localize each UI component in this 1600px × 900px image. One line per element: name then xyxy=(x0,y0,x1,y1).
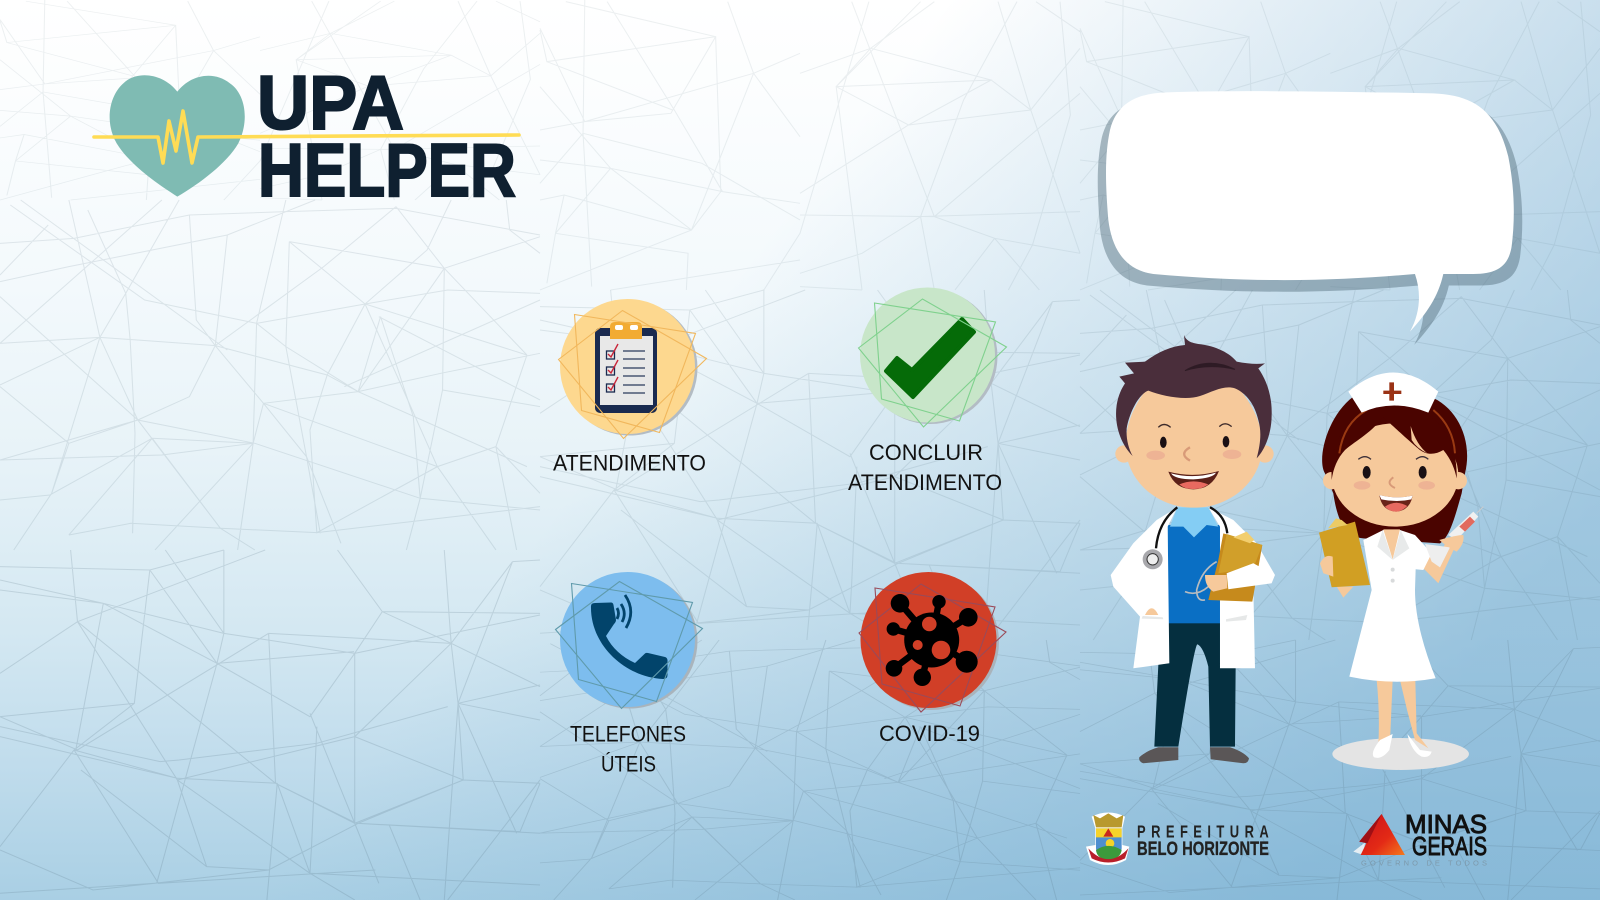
shirt collar xyxy=(1170,507,1218,537)
text: Prefeitura: PREFEITURA xyxy=(1137,823,1269,842)
hair back xyxy=(1322,397,1467,543)
eyes, cheeks, nose xyxy=(1354,457,1435,490)
mouth xyxy=(1379,495,1413,512)
logo: UPA Helper xyxy=(94,61,519,212)
face xyxy=(1126,387,1262,508)
icon: coat of arms xyxy=(1086,812,1129,865)
label xyxy=(570,722,686,776)
icon circle xyxy=(862,289,998,424)
icon circle xyxy=(562,574,698,708)
logo: Minas Gerais xyxy=(1353,809,1487,868)
title: HELPER: HELPER xyxy=(258,128,516,212)
menu item: covid-19 xyxy=(859,572,1006,746)
legs xyxy=(1377,680,1428,748)
decorative squares xyxy=(556,582,702,708)
trousers xyxy=(1154,620,1236,747)
label: TELEFONES xyxy=(570,722,686,746)
hair xyxy=(1116,335,1272,458)
heartbeat line xyxy=(94,111,519,163)
nurse cap xyxy=(1348,372,1438,413)
face xyxy=(1332,423,1458,527)
nurse illustration xyxy=(1319,372,1483,770)
icon circle xyxy=(863,574,999,710)
logo: Prefeitura Belo Horizonte xyxy=(1086,812,1269,865)
doctor illustration xyxy=(1111,335,1275,763)
decorative squares xyxy=(859,584,1006,712)
menu item: concluir atendimento xyxy=(848,288,1006,495)
syringe xyxy=(1439,507,1483,552)
neck and collar xyxy=(1377,529,1409,560)
menu item: telefones uteis xyxy=(556,572,702,776)
decorative squares xyxy=(858,299,1006,427)
text: Minas: MINAS xyxy=(1405,809,1487,839)
shoes xyxy=(1373,734,1432,758)
title: UPA: UPA xyxy=(257,61,404,146)
stethoscope tube xyxy=(1185,562,1217,600)
icon: triangle xyxy=(1353,814,1405,855)
label: ATENDIMENTO xyxy=(553,450,706,476)
icon: clipboard xyxy=(595,322,657,413)
floor shadow xyxy=(1332,738,1469,770)
lab coat xyxy=(1111,507,1275,668)
sweater xyxy=(1168,525,1220,623)
menu item: atendimento xyxy=(553,299,706,476)
clipboard xyxy=(1319,518,1370,587)
speech bubble xyxy=(1098,91,1522,345)
clipboard xyxy=(1208,532,1262,602)
stethoscope xyxy=(1143,507,1227,569)
label: CONCLUIR xyxy=(869,440,983,465)
fringe xyxy=(1332,405,1457,480)
dress xyxy=(1349,530,1436,682)
hand and sleeve xyxy=(1145,575,1227,615)
label: ÚTEIS xyxy=(601,752,656,776)
eyes, cheeks, nose xyxy=(1146,424,1241,461)
decorative squares xyxy=(558,310,706,438)
mouth xyxy=(1168,471,1219,489)
icon circle xyxy=(562,300,698,436)
icon: virus xyxy=(886,594,978,686)
label: ATENDIMENTO xyxy=(848,470,1002,495)
label: COVID-19 xyxy=(879,721,980,746)
icon: phone xyxy=(591,595,668,679)
shoes xyxy=(1139,747,1249,763)
icon: heart xyxy=(110,75,245,197)
text: governo de todos: GOVERNO DE TODOS xyxy=(1361,858,1487,868)
icon: check mark xyxy=(886,319,974,397)
text: Belo Horizonte: BELO HORIZONTE xyxy=(1137,839,1269,860)
ears xyxy=(1323,472,1340,489)
ears xyxy=(1115,445,1133,463)
label xyxy=(848,440,1002,495)
text: Gerais: GERAIS xyxy=(1412,831,1487,861)
arms xyxy=(1337,540,1457,598)
